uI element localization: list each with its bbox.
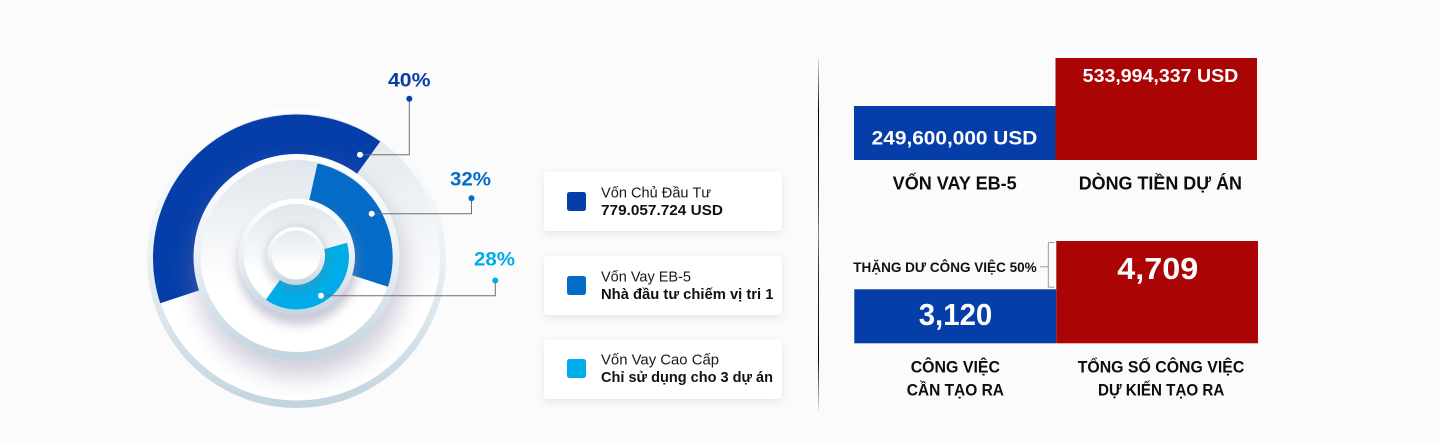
segment: 28% senior loan bbox=[266, 243, 349, 309]
callout: 40% bbox=[357, 71, 431, 158]
inner ring base bbox=[238, 198, 358, 325]
segment: 40% owner equity bbox=[153, 115, 380, 303]
center hub bbox=[266, 227, 328, 290]
label: EB-5 loan: VỐN VAY EB-5 bbox=[893, 172, 1017, 193]
callout: 40%: 40% bbox=[388, 71, 431, 92]
callout: 32% bbox=[369, 170, 491, 217]
legend card: senior loan bbox=[544, 340, 782, 399]
annotation: job surplus: THẶNG DƯ CÔNG VIỆC 50% bbox=[853, 258, 1037, 275]
callout: 32%: 32% bbox=[450, 170, 491, 191]
legend card: EB-5 loan bbox=[544, 256, 782, 315]
legend card: owner equity bbox=[544, 172, 782, 231]
annotation: job surplus bbox=[853, 242, 1054, 287]
outer ring base bbox=[147, 109, 446, 408]
label: jobs required bbox=[907, 358, 1004, 400]
label: jobs required: CÔNG VIỆC bbox=[911, 358, 1000, 377]
bar: jobs required: 3,120 bbox=[919, 297, 992, 332]
label: total jobs expected bbox=[1078, 357, 1244, 400]
donut chart bbox=[147, 109, 446, 408]
bar: total jobs expected: 4,709 bbox=[1117, 251, 1198, 286]
bar: jobs required bbox=[854, 289, 1056, 343]
bar: EB-5 loan: 249,600,000 USD bbox=[872, 128, 1037, 149]
bar: project cash flow: 533,994,337 USD bbox=[1083, 65, 1238, 86]
legend card: senior loan: Chỉ sử dụng cho 3 dự án bbox=[601, 369, 773, 386]
label: jobs required: CẦN TẠO RA bbox=[907, 381, 1004, 400]
legend card: EB-5 loan: Nhà đầu tư chiếm vị tri 1 bbox=[601, 286, 774, 303]
callout: 28%: 28% bbox=[474, 250, 515, 271]
bar chart: capital comparison bbox=[854, 58, 1257, 193]
segment: 32% EB-5 loan bbox=[296, 164, 393, 287]
legend card: owner equity: Vốn Chủ Đầu Tư bbox=[601, 184, 711, 201]
bar chart: job comparison bbox=[853, 241, 1258, 400]
bar: total jobs expected bbox=[1056, 241, 1258, 343]
legend card: EB-5 loan: Vốn Vay EB-5 bbox=[601, 268, 691, 285]
legend card: owner equity: 779.057.724 USD bbox=[601, 202, 723, 219]
label: project cash flow: DÒNG TIỀN DỰ ÁN bbox=[1079, 172, 1242, 193]
bar: project cash flow bbox=[1056, 58, 1257, 160]
callout: 28% bbox=[318, 250, 515, 299]
label: total jobs expected: DỰ KIẾN TẠO RA bbox=[1098, 381, 1224, 400]
legend card: senior loan: Vốn Vay Cao Cấp bbox=[601, 352, 719, 368]
middle ring base bbox=[194, 154, 406, 377]
bar: EB-5 loan bbox=[854, 106, 1056, 160]
label: total jobs expected: TỔNG SỐ CÔNG VIỆC bbox=[1078, 357, 1244, 377]
